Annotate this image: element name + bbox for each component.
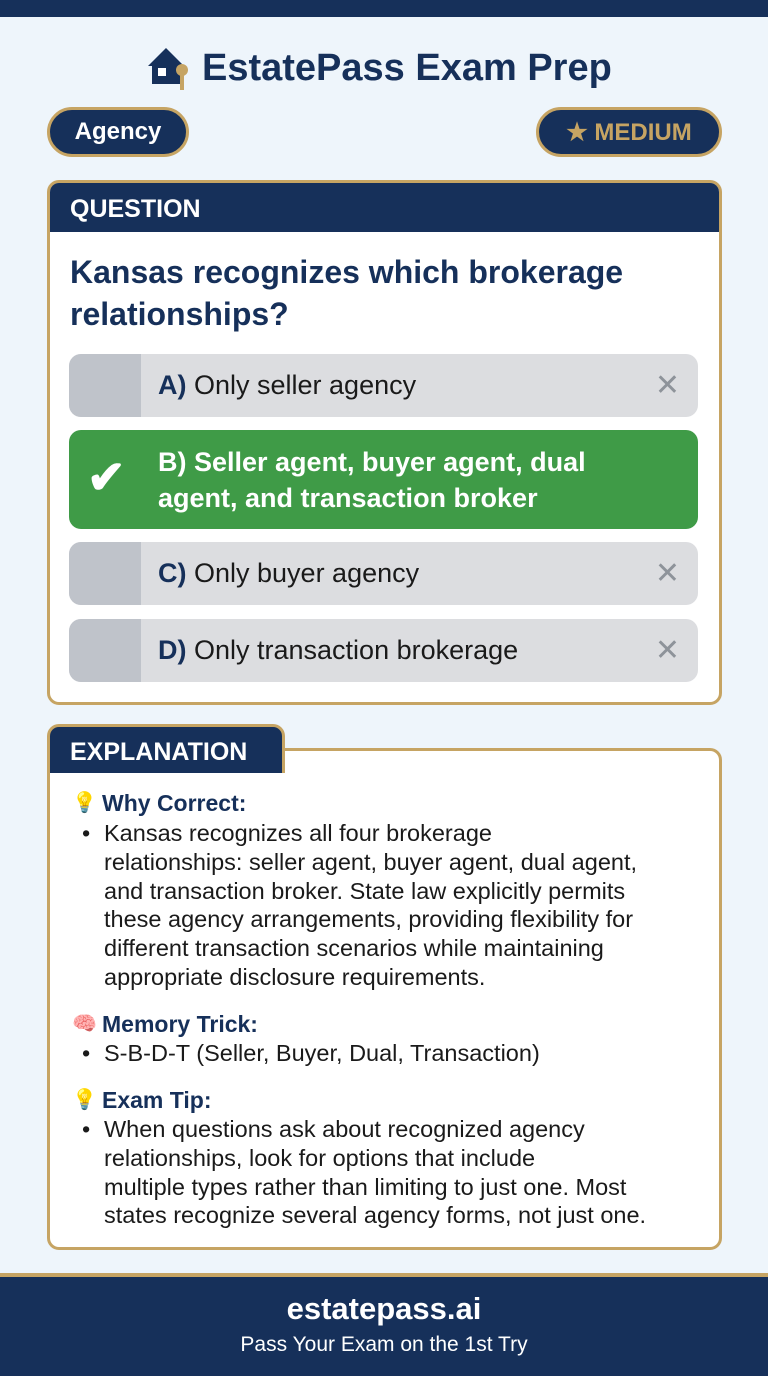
text: why correct: relationships: seller agent, buyer agent, dual agent, [104,849,637,875]
footer [0,1273,768,1376]
question text: Kansas recognizes which brokerage relationships? [70,254,623,332]
option B correct: B) Seller agent, buyer agent, dual agent, and transaction broker [158,447,586,513]
text: exam tip: multiple types rather than limiting to just one. Most [104,1174,626,1200]
heading: memory trick: Memory Trick: [102,1011,258,1037]
option C: ✕ [655,557,680,590]
footer: estatepass.ai [287,1291,481,1326]
option C: C) Only buyer agency [158,558,419,588]
explanation header [47,724,285,773]
option D [69,619,698,682]
icon: bulb: 💡 [72,792,97,814]
badge: MEDIUM [536,107,722,157]
option C [69,542,698,605]
text: exam tip: When questions ask about recognized agency [104,1116,585,1142]
panel: question [47,180,722,705]
badge: MEDIUM: ★ MEDIUM [566,118,692,146]
icon: house key [148,48,188,90]
top bar [0,0,768,17]
question header: QUESTION [70,195,201,223]
option A: ✕ [655,369,680,402]
text: why correct: these agency arrangements, providing flexibility for [104,906,633,932]
icon: check: ✔ [87,451,126,503]
text: why correct: Kansas recognizes all four brokerage [104,820,492,846]
option A [69,354,698,417]
option B correct [69,430,698,529]
explanation header: EXPLANATION [70,738,247,766]
text: why correct: different transaction scenarios while maintaining [104,935,604,961]
text: exam tip: states recognize several agency forms, not just one. [104,1202,646,1228]
question header [50,183,719,232]
icon: brain: 🧠 [72,1013,97,1035]
badge: Agency: Agency [75,118,161,145]
option D: ✕ [655,634,680,667]
text: why correct: appropriate disclosure requirements. [104,964,485,990]
panel: explanation [47,748,722,1250]
text: why correct [82,820,637,990]
heading: why correct: Why Correct: [102,790,246,816]
footer: Pass Your Exam on the 1st Try [240,1333,528,1356]
option A: A) Only seller agency [158,370,416,400]
text: exam tip [82,1116,646,1228]
badge: Agency [47,107,189,157]
text: exam tip: relationships, look for options that include [104,1145,535,1171]
title: EstatePass Exam Prep [202,46,612,88]
text: why correct: and transaction broker. State law explicitly permits [104,878,625,904]
text: memory trick: S-B-D-T (Seller, Buyer, Dual, Transaction) [104,1040,540,1066]
icon: bulb 2: 💡 [72,1089,97,1111]
option D: D) Only transaction brokerage [158,635,518,665]
heading: exam tip: Exam Tip: [102,1087,212,1113]
